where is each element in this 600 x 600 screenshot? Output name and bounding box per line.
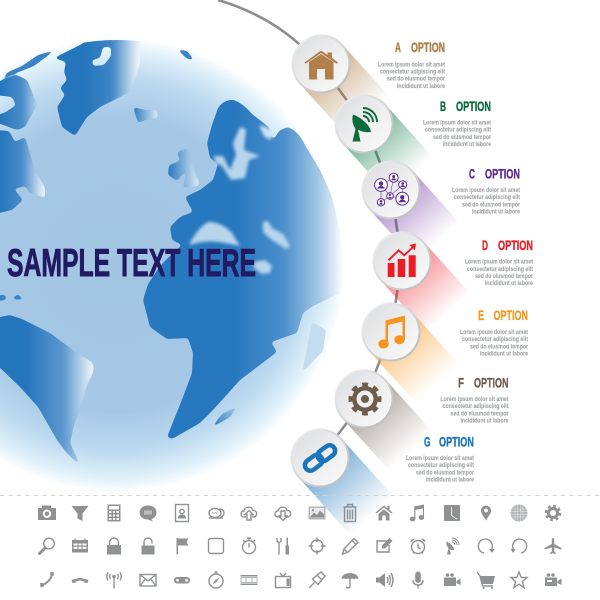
body E	[460, 329, 529, 358]
icon: gear	[350, 384, 380, 414]
heading A	[395, 40, 445, 55]
icon: umbrella	[342, 573, 358, 588]
baltic sea	[213, 127, 260, 180]
icon: globe	[510, 504, 528, 522]
heading C	[469, 166, 520, 182]
body C: incididunt ut labore	[472, 209, 520, 216]
heading F: OPTION	[474, 376, 508, 390]
canada	[0, 75, 37, 130]
heading D	[482, 238, 533, 253]
body B: incididunt ut labore	[443, 141, 491, 148]
icon: microphone	[413, 572, 423, 588]
disc B	[334, 94, 394, 154]
body D: incididunt ut labore	[485, 280, 533, 287]
icon: crosshair	[308, 538, 326, 554]
body A: sed do eiusmod tempor	[387, 76, 445, 83]
icon: map pin	[481, 506, 491, 520]
shadow D	[380, 242, 470, 332]
icon: undo	[510, 539, 527, 553]
body G	[406, 455, 475, 484]
iceland	[134, 108, 158, 122]
icon: music	[410, 504, 424, 521]
heading D: D	[482, 238, 488, 253]
north america	[0, 130, 45, 214]
icon: satellite dish	[352, 108, 377, 142]
body B	[423, 120, 492, 148]
icon: square clock	[444, 505, 460, 521]
panel: option A	[292, 34, 446, 135]
body D	[465, 259, 534, 287]
panel: option C	[362, 160, 521, 261]
heading B	[440, 99, 491, 114]
body F: consectetur adipiscing elit	[442, 403, 509, 410]
icon: speaker	[376, 573, 393, 587]
icon: funnel	[72, 506, 88, 521]
heading F	[458, 376, 508, 390]
icon: compass	[209, 572, 223, 588]
heading E: OPTION	[494, 308, 528, 323]
icon: trash can	[344, 504, 356, 522]
body G: sed do eiusmod tempor	[416, 469, 474, 476]
icon: house small	[376, 506, 392, 520]
icon: phone	[40, 572, 54, 588]
globe	[0, 38, 345, 491]
icon: film strip	[240, 575, 258, 585]
small islands	[0, 50, 192, 301]
body F: incididunt ut labore	[460, 418, 509, 425]
icon: gamepad	[174, 577, 190, 584]
body C: sed do eiusmod tempor	[462, 201, 520, 208]
icon: speech bubble	[140, 506, 156, 522]
heading A: OPTION	[411, 40, 445, 55]
body D: Lorem ipsum dolor sit amet	[465, 259, 534, 266]
heading C: C	[469, 166, 475, 182]
heading G	[424, 434, 474, 450]
icon: chat bubbles	[209, 508, 224, 518]
icon: camera	[38, 506, 56, 520]
body F	[440, 396, 509, 425]
body D: consectetur adipiscing elit	[467, 266, 534, 273]
arctic islands	[0, 52, 52, 82]
body E: Lorem ipsum dolor sit amet	[460, 329, 529, 336]
disc C	[362, 160, 420, 220]
icon: envelope	[140, 574, 156, 586]
uk	[168, 148, 199, 188]
eurasia and africa	[143, 100, 345, 439]
greenland	[54, 38, 140, 136]
body B: Lorem ipsum dolor sit amet	[423, 120, 492, 126]
panel: option F	[334, 370, 509, 470]
icon: flag	[176, 538, 188, 554]
heading G: G	[424, 434, 430, 450]
disc A	[292, 34, 350, 94]
heading D: OPTION	[498, 238, 533, 253]
icon: gear small	[546, 506, 560, 520]
icon: redo	[478, 539, 494, 553]
icon: star	[511, 572, 527, 588]
body A: incididunt ut labore	[397, 83, 445, 90]
icon: dish small	[446, 538, 459, 554]
icon: contact card	[176, 504, 188, 522]
disc D	[372, 232, 432, 290]
heading G: OPTION	[439, 434, 474, 450]
icon: calendar	[72, 538, 88, 552]
body A	[378, 61, 446, 90]
panel: option B	[334, 94, 492, 195]
icon: open lock	[142, 538, 154, 554]
icon: cloud download	[275, 507, 291, 520]
icon: cloud upload	[241, 507, 257, 520]
mediterranean sea	[190, 222, 240, 246]
heading B: B	[440, 99, 446, 114]
shadow C	[369, 171, 459, 261]
icon: people network	[375, 173, 409, 206]
icon: stopwatch	[242, 538, 256, 554]
icon: film camera	[545, 573, 562, 586]
icon grid	[38, 504, 562, 589]
body B: consectetur adipiscing elit	[425, 127, 492, 134]
icon: hang up	[72, 579, 88, 583]
icon: bar chart	[388, 244, 416, 277]
icon: picture	[308, 506, 326, 520]
icon: airplane	[544, 538, 562, 554]
panel: option G	[290, 428, 475, 535]
heading: SAMPLE TEXT HERE	[7, 242, 256, 285]
icon: antenna	[107, 572, 121, 588]
body B: sed do eiusmod tempor	[433, 134, 491, 141]
icon: pencil	[342, 538, 358, 554]
body E: incididunt ut labore	[480, 351, 528, 358]
heading F: F	[458, 376, 464, 390]
body G: Lorem ipsum dolor sit amet	[406, 455, 475, 462]
icon: tools	[277, 538, 289, 554]
body E: sed do eiusmod tempor	[470, 343, 528, 350]
shadow F	[342, 380, 432, 470]
icon: alarm clock	[410, 539, 426, 554]
disc E	[362, 302, 420, 362]
body C	[452, 187, 521, 216]
body D: sed do eiusmod tempor	[475, 273, 533, 280]
disc F	[334, 370, 394, 428]
icon: push pin	[309, 572, 325, 588]
heading A: A	[395, 40, 401, 55]
icon: house	[304, 50, 338, 80]
icon: lock	[107, 538, 121, 554]
india	[303, 324, 326, 370]
madagascar	[215, 408, 235, 425]
body C: Lorem ipsum dolor sit amet	[452, 187, 521, 194]
heading C: OPTION	[485, 166, 520, 182]
white sea	[259, 125, 272, 140]
body A: consectetur adipiscing elit	[380, 68, 446, 76]
icon: video camera	[444, 573, 460, 586]
body G: incididunt ut labore	[426, 477, 474, 484]
south america	[0, 315, 94, 467]
shadow G	[298, 439, 394, 535]
disc G	[290, 428, 350, 488]
black sea and caspian sea	[254, 221, 290, 274]
body E: consectetur adipiscing elit	[462, 336, 529, 343]
panel: option E	[362, 302, 529, 403]
heading B: OPTION	[456, 99, 491, 114]
icon: rounded square	[208, 538, 224, 554]
heading E: E	[478, 308, 484, 323]
shadow B	[342, 105, 432, 195]
shadow E	[369, 313, 459, 403]
connecting curve	[218, 0, 402, 458]
body A: Lorem ipsum dolor sit amet	[378, 61, 446, 68]
body F: Lorem ipsum dolor sit amet	[440, 396, 509, 403]
icon: calculator	[108, 504, 120, 522]
icon: television	[276, 573, 290, 588]
body F: sed do eiusmod tempor	[450, 410, 509, 417]
panel: option D	[372, 232, 534, 332]
heading E	[478, 308, 528, 323]
body C: consectetur adipiscing elit	[454, 194, 521, 201]
icon: shopping cart	[477, 572, 495, 589]
icon: edit	[377, 538, 392, 552]
icon: magnifier	[40, 538, 54, 554]
shadow A	[299, 45, 389, 135]
body G: consectetur adipiscing elit	[408, 462, 475, 469]
icon: music note	[378, 316, 405, 348]
icon: chain link	[303, 443, 337, 473]
